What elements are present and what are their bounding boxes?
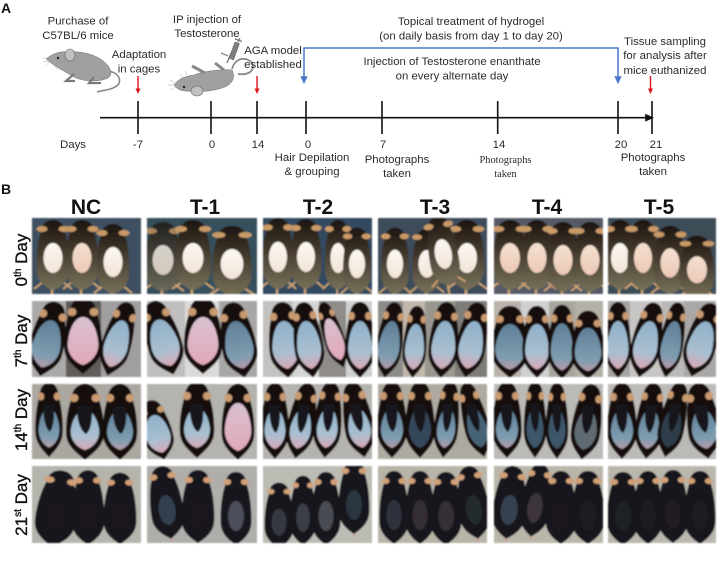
column headings: T-1 — [190, 196, 220, 219]
photo: T-1 day 7 — [146, 300, 258, 378]
photo: NC day 14 — [32, 383, 141, 460]
icon: standing mouse — [43, 49, 120, 92]
timeline text labels: Adaptation — [112, 49, 166, 61]
photo: T-1 day 21 — [145, 464, 257, 548]
panel: experimental timeline — [42, 14, 707, 180]
photo: T-4 day 21 — [490, 462, 604, 547]
photo: T-3 day 7 — [372, 300, 493, 380]
column headings — [71, 196, 674, 219]
row labels: Day — [12, 474, 31, 509]
timeline text labels: C57BL/6 mice — [42, 30, 114, 42]
timeline text labels: Hair Depilation — [275, 152, 349, 164]
row labels: th — [13, 424, 24, 432]
timeline text labels: Photographs — [365, 154, 430, 166]
photo: T-3 day 21 — [378, 464, 494, 548]
timeline text labels: (on daily basis from day 1 to day 20) — [379, 30, 563, 42]
timeline axis — [100, 101, 652, 134]
photo: NC day 0 — [32, 218, 141, 302]
row labels: 14 — [12, 432, 31, 451]
row labels: st — [13, 509, 24, 517]
photo: T-4 day 0 — [492, 217, 604, 295]
column headings: T-5 — [644, 196, 674, 219]
row labels: 0 — [12, 277, 31, 286]
icon: syringe — [221, 38, 242, 63]
photo: T-2 day 7 — [263, 299, 375, 380]
photo: T-3 day 0 — [378, 214, 487, 302]
timeline text labels: Days — [60, 139, 86, 151]
timeline text labels: 14 — [493, 139, 505, 151]
timeline text labels: Injection of Testosterone enanthate — [363, 56, 541, 68]
photo: NC day 7 — [30, 300, 142, 378]
photo: T-5 day 0 — [606, 216, 718, 296]
timeline text labels: in cages — [118, 64, 161, 76]
timeline text labels: on every alternate day — [396, 70, 509, 82]
photo grid: mice, day 0 to day 21 — [23, 214, 720, 552]
timeline text labels: Purchase of — [48, 16, 109, 28]
photo: T-3 day 14 — [377, 380, 496, 460]
timeline text labels: -7 — [133, 139, 143, 151]
row labels: th — [13, 350, 24, 358]
column headings: T-4 — [532, 196, 562, 219]
photo: T-2 day 21 — [263, 461, 372, 551]
icon: mouse receiving injection — [168, 38, 253, 96]
photo: T-5 day 7 — [605, 299, 720, 381]
timeline text labels: 0 — [209, 139, 215, 151]
timeline text labels: & grouping — [284, 166, 340, 178]
photo: T-2 day 14 — [261, 380, 379, 461]
timeline text labels: Topical treatment of hydrogel — [398, 16, 544, 28]
column headings: NC — [71, 196, 101, 219]
column headings: T-3 — [420, 196, 450, 219]
photo: T-5 day 14 — [607, 380, 720, 461]
photo: T-4 day 7 — [492, 301, 604, 379]
timeline text labels: established — [244, 59, 302, 71]
timeline text labels: Photographs — [621, 152, 686, 164]
photo: T-1 day 14 — [146, 382, 258, 460]
timeline text labels: Testosterone — [174, 28, 240, 40]
row labels: Day — [12, 314, 31, 350]
row labels: 7 — [12, 358, 31, 367]
timeline text labels: AGA model — [244, 45, 302, 57]
row labels: 21 — [12, 517, 31, 536]
row labels: Day — [12, 233, 31, 269]
panel label A: A — [1, 0, 11, 16]
timeline text labels: taken — [639, 166, 667, 178]
photo: T-2 day 0 — [260, 218, 373, 302]
row labels: th — [13, 269, 24, 277]
timeline text labels — [42, 14, 707, 180]
timeline text labels: 0 — [305, 139, 311, 151]
timeline text labels: 14 — [252, 139, 264, 151]
timeline text labels: Tissue sampling — [624, 36, 706, 48]
panel label B: B — [1, 181, 11, 197]
timeline text labels: Photographs — [480, 155, 531, 166]
row labels: Day — [12, 388, 31, 424]
timeline text labels: taken — [383, 168, 411, 180]
timeline text labels: 20 — [615, 139, 627, 151]
blue bracket arrow: hydrogel treatment — [302, 48, 620, 82]
photo: T-1 day 0 — [142, 218, 257, 304]
photo: T-4 day 14 — [492, 382, 607, 462]
red arrows — [136, 76, 653, 94]
timeline text labels: 21 — [650, 139, 662, 151]
photo: NC day 21 — [31, 466, 141, 552]
timeline text labels: mice euthanized — [624, 65, 706, 77]
photo: T-5 day 21 — [607, 466, 716, 548]
timeline text labels: taken — [494, 169, 518, 180]
row labels — [12, 233, 31, 536]
timeline text labels: 7 — [380, 139, 386, 151]
timeline text labels: for analysis after — [623, 50, 707, 62]
timeline text labels: IP injection of — [173, 14, 242, 26]
column headings: T-2 — [303, 196, 333, 219]
